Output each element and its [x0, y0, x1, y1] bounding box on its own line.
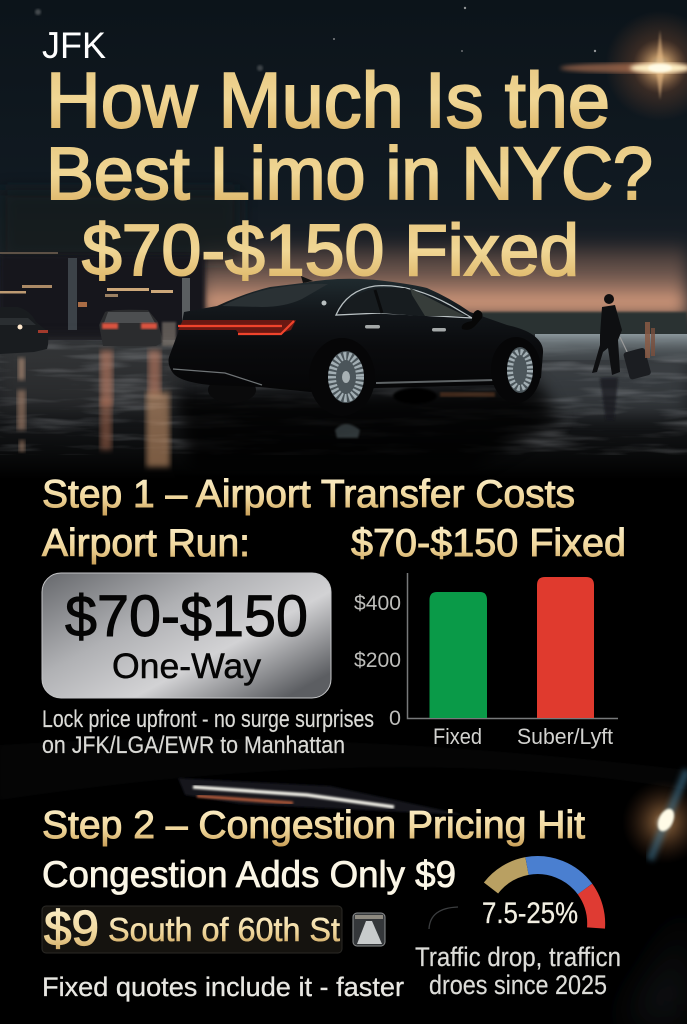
eyebrow: JFK: JFK — [42, 25, 106, 66]
subheading: congestion adds: Congestion Adds Only $9 — [42, 854, 456, 895]
note: fixed quotes: Fixed quotes include it - faster — [42, 972, 404, 1002]
car detail: headlight streak — [0, 739, 687, 815]
note: lock price: Lock price upfront - no surge surprises — [42, 706, 374, 733]
card caption: One-Way — [112, 647, 262, 686]
subheading: airport run: Airport Run: — [42, 522, 250, 565]
gauge caption: Traffic drop, trafficn — [415, 942, 621, 972]
card price: $70-$150 — [65, 584, 308, 649]
heading: step 1: Step 1 – Airport Transfer Costs — [42, 473, 575, 516]
price strip: $9 south of 60th — [42, 902, 342, 956]
price headline: $70-$150 Fixed — [82, 211, 579, 291]
icon: faint curved arrow — [429, 907, 458, 929]
subheading: price: $70-$150 Fixed — [351, 522, 626, 565]
section: step 1 — [42, 473, 626, 759]
bar chart: fixed vs surge — [354, 573, 618, 749]
light reflections on wet ground — [17, 350, 170, 467]
bar chart: fixed vs surge: $200 — [354, 649, 401, 672]
section: step 2 — [42, 804, 621, 1002]
wet ground — [0, 340, 687, 480]
limousine sedan — [168, 276, 560, 470]
gauge: traffic drop — [491, 865, 596, 928]
gauge caption — [415, 942, 621, 1000]
heading: step 2: Step 2 – Congestion Pricing Hit — [42, 804, 585, 847]
distant skyline and water — [480, 312, 687, 360]
bar chart: fixed vs surge: 0 — [389, 707, 401, 730]
note: lock price — [42, 706, 374, 759]
icon: lens flare top right — [560, 11, 687, 121]
background cars — [0, 307, 176, 354]
gauge caption: droes since 2025 — [429, 970, 607, 1000]
title line 2: Best Limo in NYC? — [46, 132, 653, 215]
price strip: $9 south of 60th: South of 60th St — [108, 911, 340, 948]
bar chart: fixed vs surge: Fixed — [433, 724, 482, 749]
terminal building left — [0, 252, 205, 340]
silver price card — [42, 573, 331, 698]
bar chart: fixed vs surge: $400 — [354, 592, 401, 615]
icon: lens flare bottom right — [620, 770, 687, 1024]
traveller with suitcase — [592, 294, 655, 420]
background: night airport sky — [0, 0, 687, 340]
title block — [42, 25, 653, 291]
note: lock price: on JFK/LGA/EWR to Manhattan — [42, 732, 345, 759]
title line 1: How Much Is the — [46, 56, 610, 144]
icon: road tunnel — [353, 913, 385, 946]
bar chart: fixed vs surge: Suber/Lyft — [517, 724, 613, 749]
price strip: $9 south of 60th: $9 — [44, 902, 99, 956]
bar: fixed — [430, 592, 487, 718]
gauge value: 7.5-25% — [482, 897, 578, 930]
bar: suber/lyft — [537, 577, 594, 718]
